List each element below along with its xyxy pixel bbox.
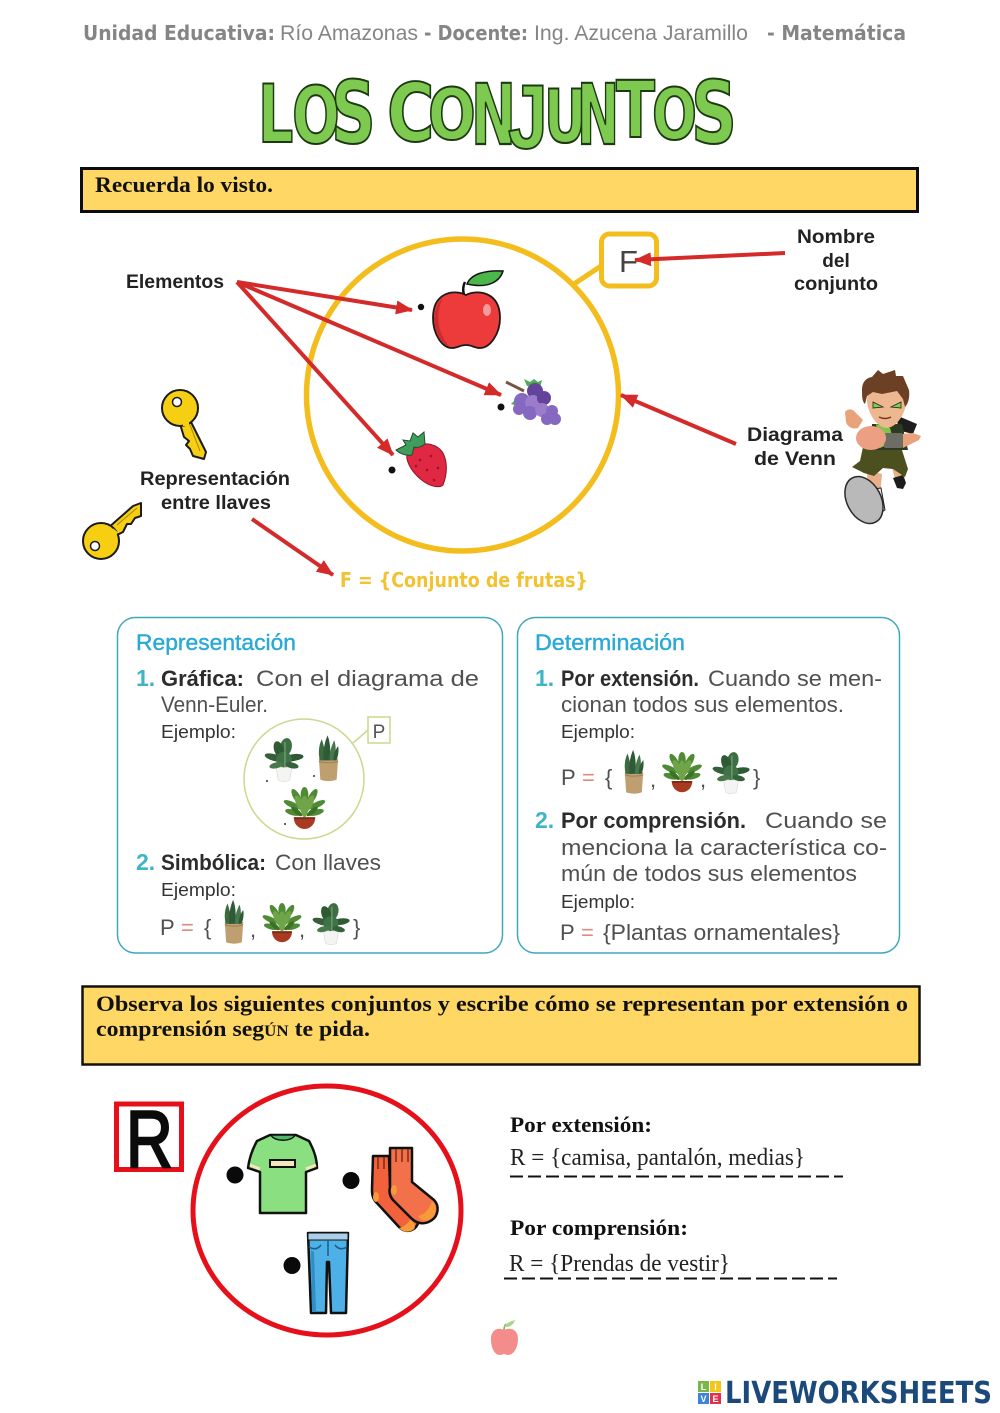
item 2 text: Simbólica: bbox=[161, 850, 266, 875]
header line bbox=[83, 21, 906, 45]
title: S bbox=[331, 63, 376, 164]
symbolic example: } bbox=[353, 915, 360, 940]
item 2 text bbox=[535, 807, 887, 912]
banner: instrucciones: Observa los siguientes conjuntos y escribe cómo se representan por extensión o bbox=[96, 991, 908, 1016]
symbolic example: , bbox=[299, 917, 305, 942]
answer: por extension: R = {camisa, pantalón, medias} bbox=[510, 1145, 805, 1171]
icon: jeans bbox=[308, 1233, 348, 1313]
hair bbox=[862, 370, 909, 407]
element dots bbox=[226, 1166, 360, 1274]
comprehension example: P bbox=[560, 920, 575, 945]
icon: key upper bbox=[162, 390, 206, 459]
icon: strawberry bbox=[396, 432, 446, 487]
front leg bbox=[867, 470, 882, 502]
comprehension example: {Plantas ornamentales} bbox=[603, 920, 840, 945]
extension example: = bbox=[582, 765, 595, 790]
symbolic example bbox=[160, 900, 360, 945]
label: diagrama de venn: Diagrama bbox=[747, 425, 843, 446]
arrow: set name bbox=[635, 253, 785, 260]
answer: por extension bbox=[510, 1112, 843, 1176]
item 1 text: Gráfica: bbox=[161, 666, 244, 691]
title: N bbox=[577, 68, 619, 165]
set diagram R bbox=[193, 1086, 461, 1335]
comprehension example: = bbox=[581, 920, 594, 945]
label: representacion entre llaves bbox=[140, 469, 290, 514]
banner: recuerda: Recuerda lo visto. bbox=[95, 172, 273, 197]
set name box R: R bbox=[126, 1094, 173, 1185]
face bbox=[867, 387, 906, 428]
extension example: , bbox=[650, 767, 656, 792]
header line: - Matemática bbox=[767, 21, 906, 45]
element dots bbox=[388, 304, 504, 474]
answer: por comprension bbox=[504, 1215, 837, 1278]
arrow: venn diagram bbox=[621, 395, 736, 444]
item 1 text: Venn-Euler. bbox=[161, 692, 268, 717]
title bbox=[258, 62, 737, 168]
icon: grapes bbox=[506, 379, 561, 425]
banner: instrucciones: comprensión seg ÚN te pida. bbox=[96, 1016, 370, 1041]
title: T bbox=[616, 65, 655, 156]
logo: liveworksheets: E bbox=[712, 1394, 719, 1404]
icon: apple bbox=[433, 271, 503, 348]
answer: por comprension: R = {Prendas de vestir} bbox=[509, 1251, 730, 1277]
header line: Ing. Azucena Jaramillo bbox=[534, 22, 748, 45]
icon: socks bbox=[372, 1148, 438, 1232]
header line: - Docente: bbox=[424, 21, 528, 45]
item 2 text: mún de todos sus elementos bbox=[561, 861, 857, 886]
title: J bbox=[508, 67, 548, 168]
brace notation: F = {Conjunto de frutas} bbox=[340, 568, 588, 592]
set name box: F bbox=[619, 244, 638, 279]
icon: boy character bbox=[837, 370, 921, 530]
answer: por extension: Por extensión: bbox=[510, 1112, 652, 1137]
title: U bbox=[544, 74, 586, 159]
item 2 text bbox=[136, 849, 381, 900]
set name box bbox=[574, 234, 656, 286]
item 1 text bbox=[136, 665, 479, 742]
extension example bbox=[561, 750, 760, 794]
mini venn diagram bbox=[244, 717, 390, 839]
title: O bbox=[292, 72, 340, 163]
symbolic example: { bbox=[204, 915, 211, 940]
item 2 text: Ejemplo: bbox=[561, 892, 635, 912]
item 1 text: 1. bbox=[535, 665, 554, 691]
sleeve bbox=[897, 416, 917, 434]
label: nombre del conjunto: del bbox=[822, 251, 850, 272]
item 2 text: Por comprensión. bbox=[561, 808, 746, 833]
heading: Representación bbox=[136, 630, 296, 655]
title: O bbox=[652, 73, 697, 156]
item 2 text: Con llaves bbox=[275, 850, 381, 875]
symbolic example: = bbox=[181, 915, 194, 940]
item 2 text: Ejemplo: bbox=[161, 880, 236, 900]
torso bbox=[870, 424, 908, 450]
label: representacion entre llaves: Representación bbox=[140, 469, 290, 490]
title: L bbox=[258, 69, 293, 162]
heading: Determinación bbox=[535, 630, 685, 655]
item 2 text: 2. bbox=[136, 849, 155, 875]
extension example: P bbox=[561, 765, 576, 790]
answer: por comprension: Por comprensión: bbox=[510, 1215, 688, 1240]
icon: pink apple bbox=[491, 1320, 518, 1355]
logo: liveworksheets: L bbox=[701, 1382, 707, 1392]
symbolic example: , bbox=[250, 917, 256, 942]
venn circle bbox=[306, 239, 618, 551]
title: C bbox=[387, 68, 434, 161]
item 1 text: 1. bbox=[136, 665, 155, 691]
sole bbox=[837, 470, 891, 530]
arrows to elements bbox=[237, 282, 501, 455]
icon: key lower bbox=[83, 503, 141, 559]
label: nombre del conjunto: conjunto bbox=[794, 274, 878, 295]
item 1 text: Por extensión. bbox=[561, 666, 699, 691]
label: representacion entre llaves: entre llaves bbox=[161, 493, 271, 514]
item 1 text: Cuando se men- bbox=[708, 666, 882, 691]
shorts bbox=[852, 447, 908, 477]
extension example: { bbox=[605, 765, 612, 790]
banner: instrucciones bbox=[82, 986, 920, 1064]
panel: venn diagram of fruit bbox=[237, 234, 656, 551]
item 2 text: Cuando se bbox=[765, 808, 887, 833]
symbolic example: P bbox=[160, 915, 175, 940]
label: diagrama de venn bbox=[747, 425, 843, 470]
item 1 text: Ejemplo: bbox=[561, 722, 635, 742]
label: diagrama de venn: de Venn bbox=[754, 449, 836, 470]
label: nombre del conjunto bbox=[794, 227, 878, 295]
panel: determinacion bbox=[518, 618, 900, 953]
back leg and shoe bbox=[892, 468, 905, 482]
title: O bbox=[428, 75, 476, 157]
extension example: } bbox=[753, 765, 760, 790]
logo: liveworksheets: V bbox=[700, 1394, 707, 1404]
arms bbox=[845, 409, 863, 429]
item 1 text: cionan todos sus elementos. bbox=[561, 692, 844, 717]
item 1 text bbox=[535, 665, 882, 742]
eyes bbox=[873, 402, 901, 408]
header line: Río Amazonas bbox=[280, 22, 418, 45]
extension example: , bbox=[700, 767, 706, 792]
item 1 text: Con el diagrama de bbox=[256, 666, 479, 691]
mini venn diagram: P bbox=[373, 722, 385, 743]
item 2 text: menciona la característica co- bbox=[561, 835, 887, 860]
title: N bbox=[471, 67, 516, 164]
arrow: brace notation bbox=[252, 519, 333, 575]
title: S bbox=[691, 62, 737, 163]
label: nombre del conjunto: Nombre bbox=[797, 227, 875, 248]
logo: liveworksheets: I bbox=[714, 1382, 717, 1392]
banner: recuerda bbox=[82, 168, 918, 212]
item 1 text: Ejemplo: bbox=[161, 722, 236, 742]
header line: Unidad Educativa: bbox=[83, 21, 275, 45]
label: elementos: Elementos bbox=[126, 272, 224, 293]
panel: representacion bbox=[118, 618, 502, 953]
item 2 text: 2. bbox=[535, 807, 554, 833]
icon: shirt bbox=[248, 1135, 317, 1213]
